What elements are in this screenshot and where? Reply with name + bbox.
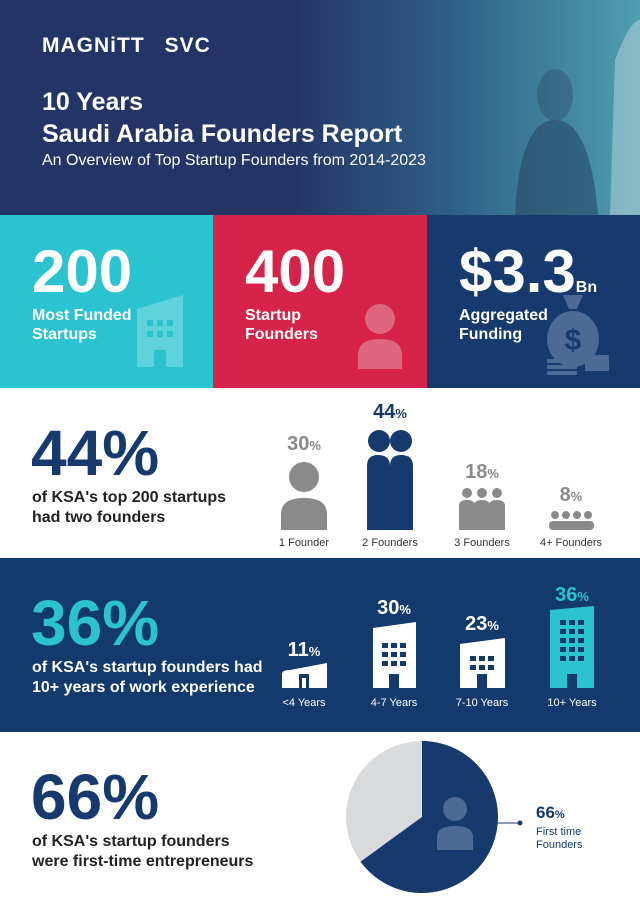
pie chart: Founders — [536, 839, 583, 851]
chart: founders: 1 Founder — [279, 537, 329, 549]
photo figures — [515, 20, 640, 215]
title: 10 Years — [42, 88, 143, 116]
panel: 400 founders: 400 — [245, 238, 345, 305]
chart: founders — [279, 401, 603, 549]
section: first-time: of KSA's startup founders — [32, 833, 230, 850]
chart: founders: 4+ Founders — [540, 537, 603, 549]
title — [42, 88, 402, 148]
panel: 400 founders: Founders — [245, 326, 318, 343]
section: first-time: were first-time entrepreneurs — [32, 853, 253, 870]
panel: 400 founders: Startup — [245, 307, 301, 324]
chart: buildings: 36% — [555, 584, 589, 606]
pie chart: 66% — [536, 803, 565, 822]
panel: 200 startups — [0, 215, 213, 388]
icon: money bag — [547, 295, 609, 375]
icon: building — [137, 295, 183, 367]
panel: funding: $3.3Bn — [459, 238, 597, 305]
section: experience — [0, 558, 640, 732]
chart: founders: 2 Founders — [362, 537, 418, 549]
section: first-time: 66% — [31, 761, 159, 833]
chart: founders: 18% — [465, 461, 499, 483]
header — [0, 0, 640, 215]
section: founders count — [31, 401, 603, 549]
chart: buildings: 4-7 Years — [371, 697, 418, 709]
chart: buildings: 23% — [465, 613, 499, 635]
chart: buildings: 7-10 Years — [456, 697, 509, 709]
chart: buildings — [282, 584, 597, 709]
chart: founders: 3 Founders — [454, 537, 510, 549]
section: experience: 36% — [31, 587, 159, 659]
panel: funding: Aggregated — [459, 307, 548, 324]
panel: 200 startups: Most Funded — [32, 307, 132, 324]
section: experience: 10+ years of work experience — [32, 679, 255, 696]
icon: money bag: $ — [565, 324, 582, 357]
logos: MAGNiTT SVC — [42, 34, 211, 57]
section: first-time — [31, 741, 583, 893]
panel: funding: Funding — [459, 326, 522, 343]
title: Saudi Arabia Founders Report — [42, 120, 402, 148]
panel: 200 startups: 200 — [32, 238, 132, 305]
pie chart: First time — [536, 826, 581, 838]
chart: founders: 30% — [287, 433, 321, 455]
panel: funding — [427, 215, 640, 388]
pie chart — [346, 741, 583, 893]
chart: buildings: 10+ Years — [547, 697, 597, 709]
chart: buildings: <4 Years — [282, 697, 326, 709]
section: founders count: 44% — [31, 417, 159, 489]
icon: person — [358, 304, 402, 369]
chart: founders: 44% — [373, 401, 407, 423]
panel: 400 founders — [213, 215, 427, 388]
chart: buildings: 11% — [288, 639, 321, 661]
chart: buildings: 30% — [377, 597, 411, 619]
subtitle: An Overview of Top Startup Founders from 2014-2023 — [42, 152, 426, 169]
section: founders count: had two founders — [32, 509, 165, 526]
section: founders count: of KSA's top 200 startups — [32, 489, 226, 506]
section: experience: of KSA's startup founders had — [32, 659, 262, 676]
panel: 200 startups: Startups — [32, 326, 97, 343]
chart: founders: 8% — [560, 484, 583, 506]
